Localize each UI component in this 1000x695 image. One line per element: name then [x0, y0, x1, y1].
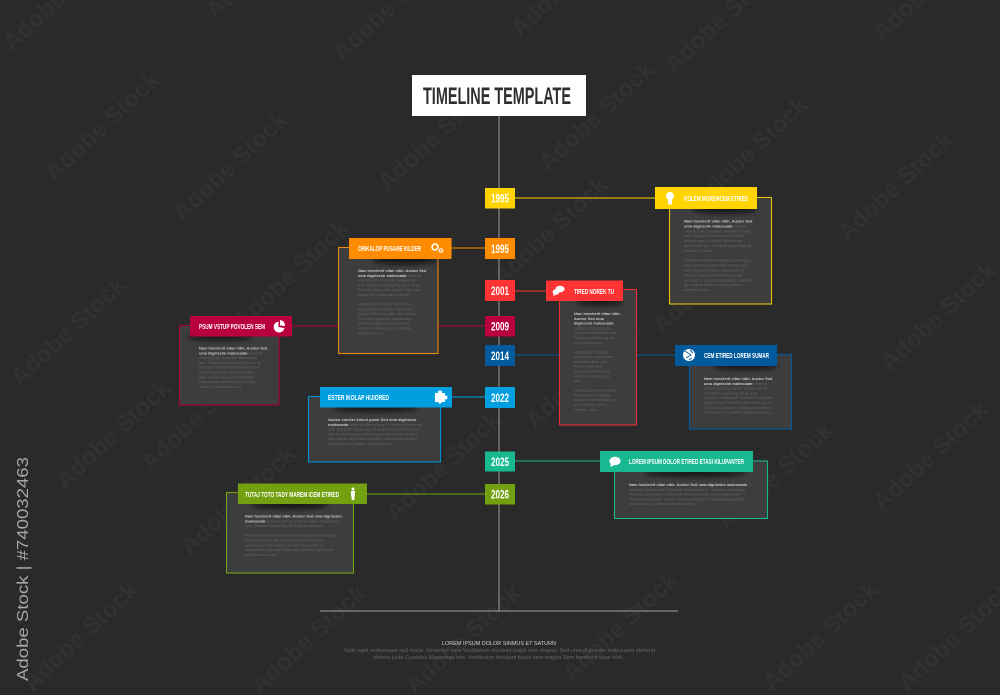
text block: red: orci.	[574, 378, 581, 383]
connector: teal	[515, 460, 600, 462]
heading: crimson: PSUM VSTUP POVOLEN SEM	[199, 322, 265, 331]
icon: gears	[432, 244, 443, 252]
text block: orange: eleifend dignissim malesuada	[358, 321, 410, 326]
text block: light blue: nibh. Auctor Sed uma dignissim malesuada eleifend	[328, 436, 417, 441]
watermark pattern: Adobe Stock	[488, 171, 614, 291]
text block: red	[574, 311, 621, 412]
text block: crimson: sem magna Nam hendrerit vitae	[199, 370, 254, 374]
panel: red	[546, 280, 636, 425]
text block: teal: ultrices justo Curabitur Maecenas orci.	[629, 501, 695, 506]
panel: green	[226, 484, 367, 573]
central timeline axis	[498, 115, 500, 611]
watermark pattern: Adobe Stock	[758, 576, 884, 695]
text block: dark blue: magna Nam hendrerit vitae nibh. Auctor	[704, 400, 773, 405]
text block: teal: eleifend ultrices justo Curabitur Maecenas orci. Tincidunt adipiscing	[629, 487, 745, 492]
text block: yellow: uma dignissim malesuada eleifend	[684, 223, 747, 228]
year marker: 2014	[485, 345, 515, 366]
connector: green	[367, 493, 485, 495]
icon: light bulb	[666, 192, 674, 204]
panel: teal	[600, 451, 768, 518]
connector: red	[515, 290, 546, 292]
text block: yellow: et at ac tincidunt.	[684, 248, 713, 253]
text block: yellow: uma dignissim malesuada eleifend	[684, 268, 744, 272]
text block: crimson: Nam hendrerit vitae nibh. Auctor Sed	[199, 346, 268, 350]
year marker: 1995 yellow	[485, 188, 515, 208]
watermark pattern: Adobe Stock	[648, 219, 774, 339]
panel: yellow	[655, 187, 772, 304]
text block: yellow: ultrices justo Curabitur Maecenas	[684, 272, 742, 277]
year marker: 2001: 2001	[491, 284, 509, 298]
text block: red: turpis sem magna Nam	[574, 354, 614, 359]
icon: person	[351, 488, 355, 500]
footer text: ultrices justo Curabitur Maecenas orci. Vestibulum tincidunt turpis sem magna Nam hendrerit vitae nibh.	[373, 655, 624, 661]
text block: light blue	[328, 417, 422, 446]
text block: orange: ultrices justo Curabitur Maecenas	[358, 278, 416, 283]
text block: yellow	[684, 218, 754, 292]
icon: puzzle piece	[435, 390, 448, 404]
text block: red: Curabitur Maecenas orci.	[574, 330, 617, 335]
text block: red: Nam hendrerit vitae nibh.	[574, 311, 621, 316]
side stock id label: Adobe Stock | #740032463	[15, 457, 32, 681]
text block: orange: uma dignissim malesuada eleifend	[358, 273, 421, 278]
watermark pattern: Adobe Stock	[521, 314, 647, 434]
heading: red: TIRED NOREK TU	[574, 287, 614, 296]
connector: dark blue	[515, 354, 675, 356]
text block: crimson: nibh. Auctor Sed uma dignissim	[199, 374, 254, 379]
watermark pattern: Adobe Stock	[558, 566, 684, 686]
year marker: 2009: 2009	[491, 320, 509, 334]
year marker: 2025: 2025	[491, 455, 509, 469]
text block: orange: Vestibulum tincidunt turpis sem	[358, 302, 412, 306]
year marker: 2009	[485, 316, 515, 336]
text block: red: eleifend ultrices justo	[574, 373, 610, 378]
year marker: 2022: 2022	[491, 391, 509, 405]
title: TIMELINE TEMPLATE	[423, 83, 571, 110]
panel: crimson	[180, 316, 292, 405]
text block: yellow: ultrices justo Curabitur Manductor Sed	[684, 228, 750, 233]
text block: green	[245, 514, 342, 557]
icon: chat bubbles	[553, 286, 565, 296]
footer text: Justo eget scelerisque sed morbi. Senectus uma Vestibulum tincidunt turpis sem magna. Sed uma dignissim malesuada eleifend	[343, 648, 655, 654]
text block: dark blue: uma dignissim malesuada eleifend	[704, 381, 767, 386]
connector: yellow	[515, 197, 655, 199]
text block: green: vel illum dolore eu	[245, 552, 276, 557]
text block: red: veniam, quis	[574, 407, 596, 412]
text block: red: Auctor Sed uma	[574, 316, 605, 321]
text block: crimson: Curabitur Maecenas orci.	[199, 384, 242, 389]
text block: red: Auctor Sed uma	[574, 364, 603, 369]
text block: crimson: uma dignissim malesuada eleifend	[199, 350, 262, 355]
text block: yellow: orci.Auctor Sed uma dignissim malesua-	[684, 277, 754, 282]
text block: crimson: orci. Tincidunt adipiscing elit et at ac	[199, 360, 261, 365]
watermark pattern: Adobe Stock	[688, 91, 814, 211]
text block: green: malesuada eleifend ultrices justo Curabitur Maecenas	[245, 518, 339, 523]
text block: orange: magna Nam hendrerit vitae nibh.	[358, 306, 414, 311]
text block: yellow: orci.zenas orci. Tincidunt adipiscing elit	[684, 243, 752, 248]
text block: dark blue: Sed uma dignissim malesuada eleifend	[704, 405, 772, 410]
panel: light blue	[308, 387, 452, 462]
text block: red: aliquam erat volutpat. Ut	[574, 397, 617, 402]
text block: teal: hendrerit vitae nibh. Auctor Sed uma dignissim malesuada eleifend	[629, 496, 744, 501]
panel: orange	[338, 238, 452, 354]
watermark pattern: Adobe Stock	[534, 56, 660, 176]
text block: yellow: ultrices justo Curabitur Maecenas	[684, 238, 742, 243]
text block: light blue: lum tincidunt turpis sem magna Nam hendrerit vitae	[328, 431, 417, 436]
text block: dark blue: Tincidunt adipiscing elit et at ac	[704, 390, 758, 395]
text block: green: consequat. Duis autem vel eum iriure dolor in	[245, 542, 323, 547]
text block: red: Vestibulum tincidunt	[574, 349, 610, 354]
watermark pattern: Adobe Stock	[833, 126, 959, 246]
year marker: 2026: 2026	[491, 488, 509, 502]
heading: teal: LOREM IPSUM DOLOR ETIRED ETASI KILUPANTER	[629, 457, 745, 466]
text block: crimson: malesuada eleifend ultrices justo	[199, 379, 255, 384]
text block: green: Vestibulum tincidunt turpis sem magna Nam hendrerit	[245, 533, 338, 538]
text block: light blue: Auctor somere kilorel puser Sed uma dignissim.	[328, 417, 417, 422]
watermark pattern: Adobe Stock	[18, 576, 144, 695]
connector: light blue	[452, 396, 485, 398]
year marker: 1995 orange: 1995	[491, 242, 509, 256]
text block: red: dignissim malesuada	[574, 368, 611, 374]
year marker: 2014: 2014	[491, 349, 509, 363]
watermark pattern: Adobe Stock	[40, 66, 166, 186]
heading: yellow: KOLEM MOREMCEM ETIRED	[684, 194, 748, 203]
text block: orange: dignissim malesuada eleifend	[358, 292, 409, 297]
text block: red: hendrerit vitae nibh.	[574, 359, 608, 364]
watermark pattern: Adobe Stock	[176, 440, 302, 560]
icon: speech bubble	[609, 457, 621, 467]
year marker: 1995 yellow: 1995	[491, 192, 509, 206]
heading: green: TUTAJ TOTO TADY MAREM ICEM ETIRED	[245, 490, 339, 499]
watermark pattern: Adobe Stock	[373, 76, 499, 196]
watermark pattern: Adobe Stock	[876, 256, 1000, 376]
text block: teal	[629, 482, 748, 506]
text block: yellow: Nam hendrerit vitae nibh. Auctor Sed	[684, 218, 753, 224]
year marker: 2001	[485, 280, 515, 301]
text block: red: laoreet dolore magna	[574, 392, 612, 397]
text block: red: Tincidunt adipiscing elit	[574, 335, 615, 340]
title	[412, 75, 586, 116]
text block: red: Lorem ipsum dolor elit at	[574, 388, 618, 393]
text block: yellow: Vestibulum tincidunt turpis sem magna	[684, 258, 751, 263]
icon: globe	[683, 349, 695, 361]
footer text: LOREM IPSUM DOLOR SINMUS ET SATURN	[442, 641, 556, 647]
text block: dark blue: ultrices justo Curabitur Maecenas orci.	[704, 410, 770, 415]
footer text	[343, 641, 655, 661]
text block: yellow: Maecenas orci.	[684, 287, 710, 292]
timeline base line	[320, 610, 678, 612]
year marker: 2022	[485, 387, 515, 408]
year marker: 1995 orange	[485, 238, 515, 259]
text block: red: wisi enim ad minim	[574, 402, 607, 407]
text block: orange: tincidunt Nam nibh. Auctor Sed uma	[358, 287, 421, 292]
connector: orange	[451, 247, 485, 249]
text block: orange: orci. Tincidunt adipiscing elit et at ac	[358, 282, 420, 287]
text block: yellow: Nam hendrerit vitae nibh. Auctor Sed	[684, 263, 748, 268]
text block: green: orci. Tincidunt adipiscing elit et at ac tincidunt.	[245, 523, 324, 528]
text block: teal: elit et at ac tincidunt Vestibulum tincidunt turpis sem magna Nam	[629, 492, 740, 497]
text block: crimson	[199, 346, 268, 389]
watermark pattern: Adobe Stock	[51, 374, 177, 494]
icon: pie chart	[274, 320, 285, 332]
connector: crimson	[292, 325, 485, 327]
text block: green: suscipit lobortis nisl ut aliquip ex ea commodo	[245, 538, 324, 542]
watermark pattern: Adobe Stock	[136, 356, 262, 476]
text block: orange	[358, 268, 427, 335]
text block: green: Nam hendrerit vitae nibh. Auctor Sed uma dignissim	[245, 514, 342, 518]
text block: green: hendrerit in vulputate velit esse molestie consequat,	[245, 547, 334, 552]
text block: red: eleifend ultrices justo	[574, 325, 610, 330]
text block: orange: eleifend ultrices justo Curabitur	[358, 326, 412, 330]
text block: crimson: tincidunt Vestibulum tincidunt turpis	[199, 365, 260, 370]
text block: red: dignissim malesuada	[574, 321, 614, 326]
text block: teal: Nam hendrerit vitae nibh. Auctor Sed uma dignissim malesuada	[629, 482, 748, 487]
text block: yellow: da eleifend ultrices justo Curabitur	[684, 282, 744, 287]
text block: dark blue	[704, 376, 773, 415]
watermark pattern: Adobe Stock	[713, 416, 839, 536]
watermark pattern: Adobe Stock	[168, 106, 294, 226]
text block: light blue: malesuada eleifend ultrices justo Curabitur Maecenas	[328, 422, 422, 427]
text block: light blue: orci. Tincidunt adipiscing elit et at ac tincidunt Vestibu-	[328, 427, 422, 432]
text block: yellow: uma dignissim malesuada eleifend	[684, 233, 744, 238]
text block: orange: Sed uma dignissim malesuada	[358, 316, 412, 321]
text block: red: et at ac tincidunt.	[574, 340, 603, 345]
text block: dark blue: ultrices justo Curabitur Maecenas orci.	[704, 386, 770, 391]
heading: dark blue: CEM ETIRED LOREM SUMAR	[704, 351, 770, 360]
year marker: 2026	[485, 484, 515, 504]
heading: orange: ORIKALOP PUSARE KILDER	[358, 244, 422, 253]
panel: dark blue	[675, 345, 792, 429]
heading: light blue: ESTER IKOLAP HIJIORED	[328, 393, 389, 402]
text block: orange: Nam hendrerit vitae nibh. Auctor Sed	[358, 268, 427, 273]
year marker: 2025	[485, 452, 515, 472]
text block: dark blue: Nam hendrerit vitae nibh. Auctor Sed	[704, 376, 773, 381]
text block: orange: Maecenas orci.	[358, 330, 384, 335]
text block: dark blue: tincidunt Vestibulum tincidunt turpis sem	[704, 395, 773, 400]
text block: crimson: ultrices justo Curabitur Maecenas	[199, 355, 257, 360]
watermark pattern: Adobe Stock	[381, 406, 507, 526]
text block: orange: Auctor Sed uma Nam nibh. Auctor.	[358, 311, 418, 316]
text block: light blue: ultrices justo Curabitur Maecenas orci.	[328, 441, 394, 446]
watermark pattern: Adobe Stock	[868, 396, 994, 516]
watermark pattern: Adobe Stock	[6, 271, 132, 391]
watermark pattern: Adobe Stock	[229, 214, 355, 334]
